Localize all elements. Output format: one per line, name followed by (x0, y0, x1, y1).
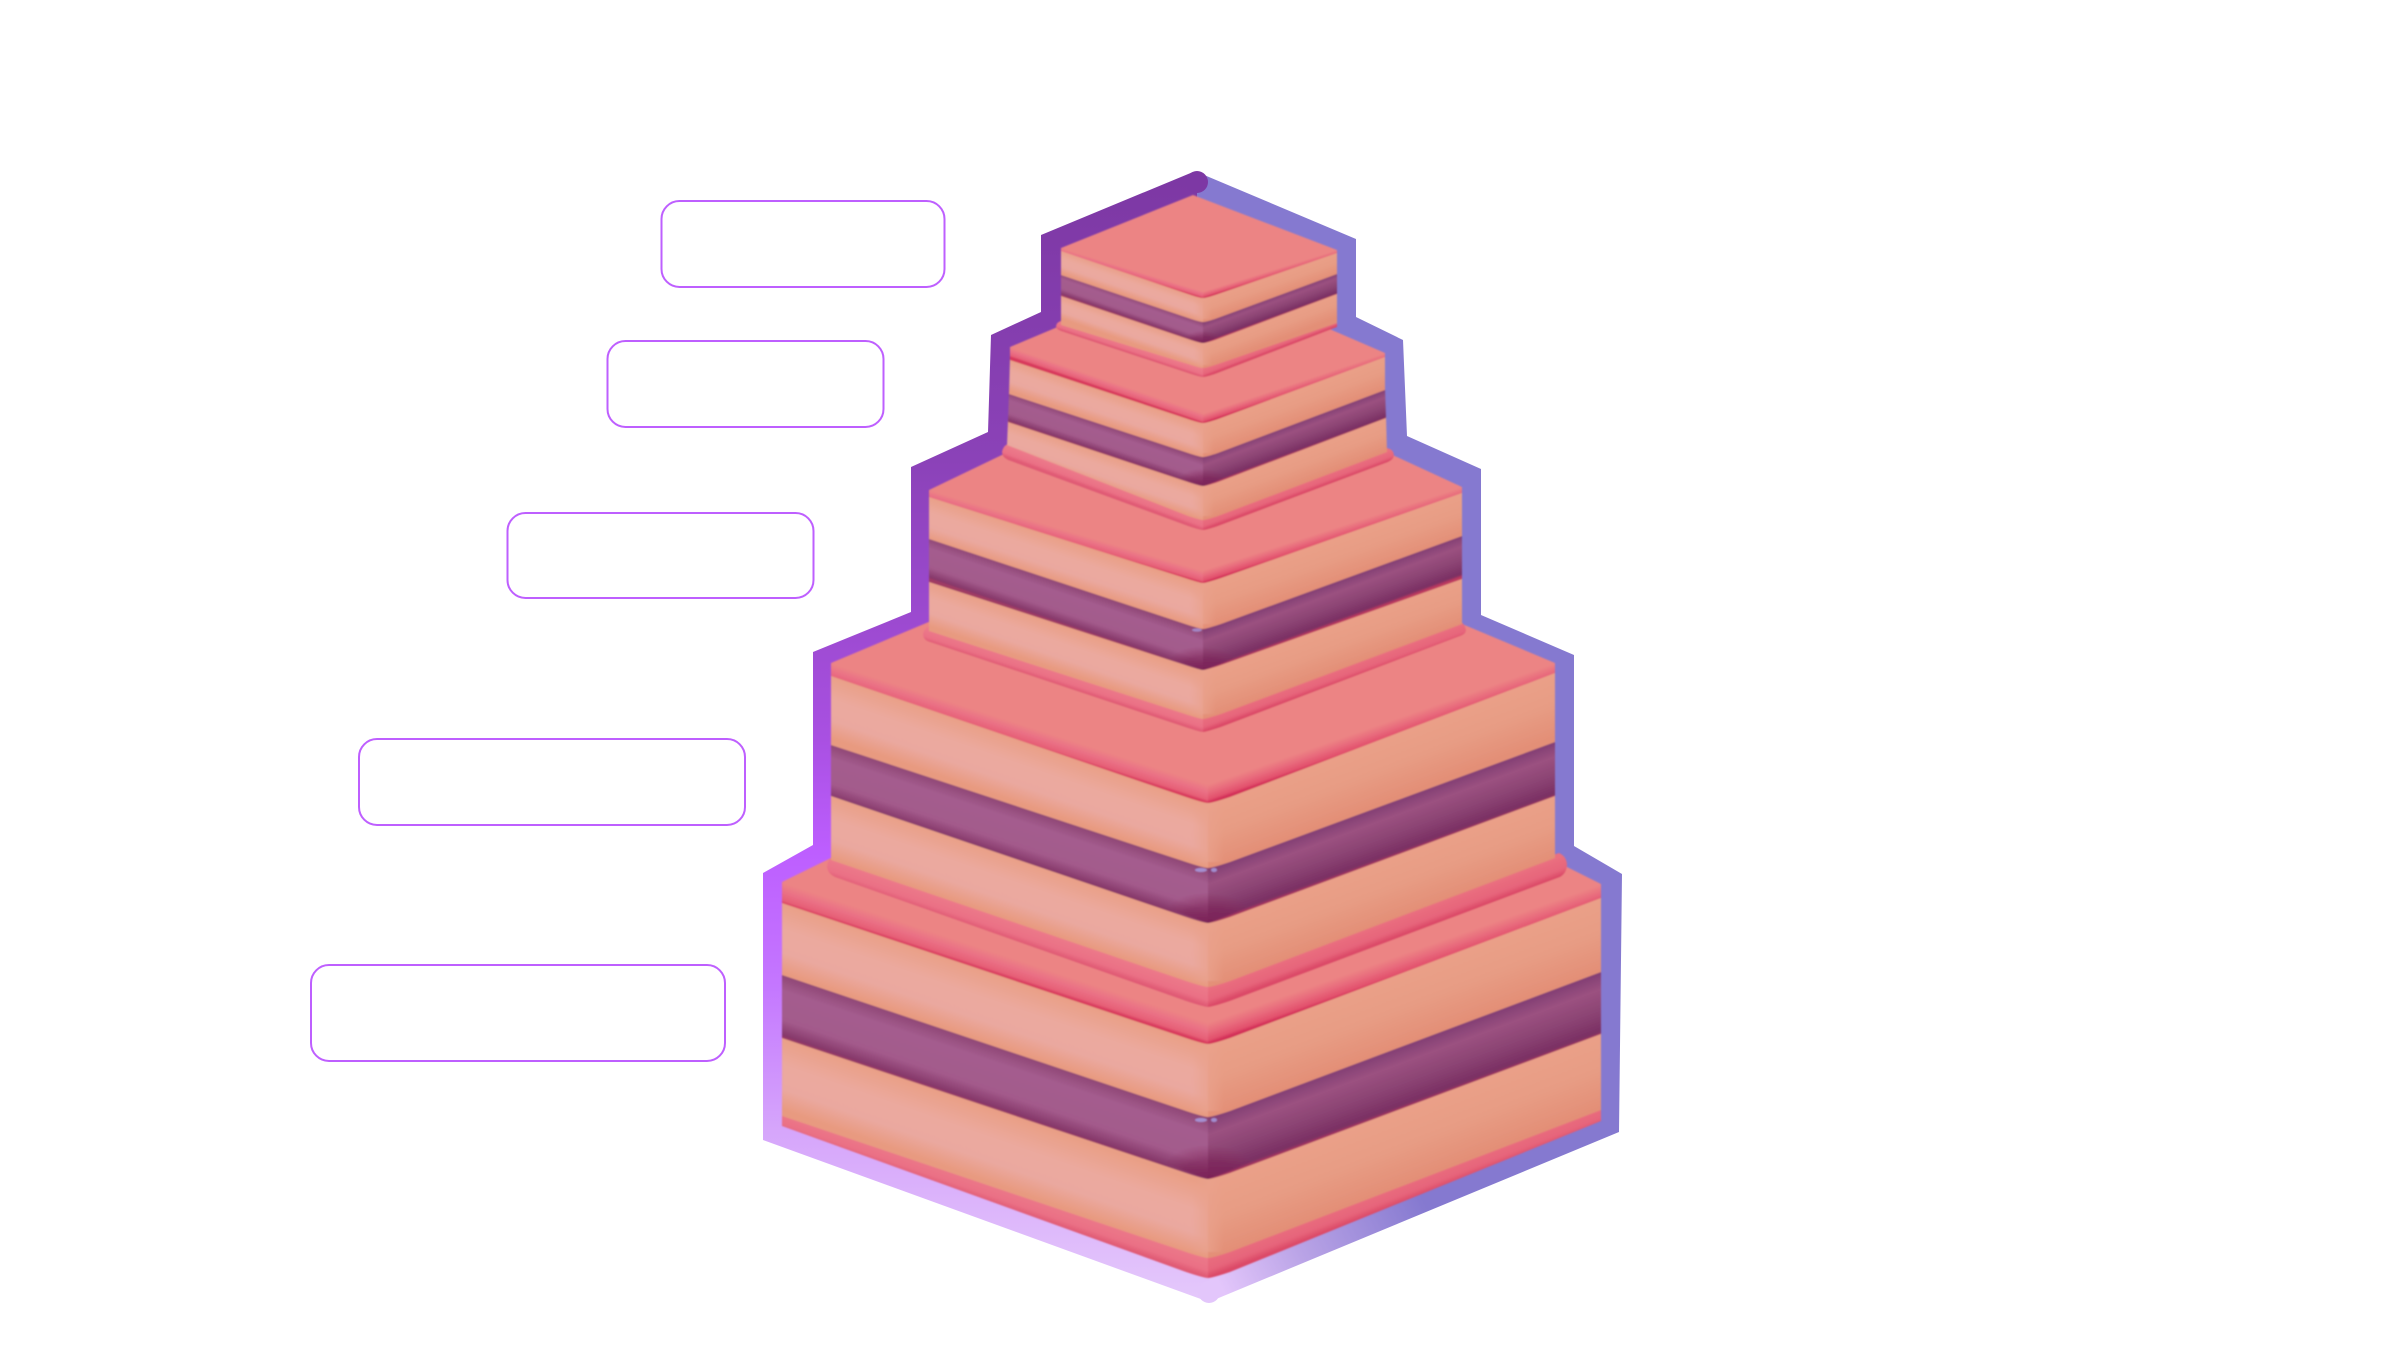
tier 5 base rim (782, 1102, 1601, 1278)
tier 2 top surface (1010, 270, 1385, 423)
tier 3 top rim (929, 487, 1462, 583)
tier 4 upper orange band (831, 671, 1555, 868)
tier 5 purple band (782, 970, 1601, 1179)
tier 1 purple band (1061, 272, 1337, 343)
pyramid tier 5 (bottom) (782, 680, 1601, 1278)
tier 1 lower orange band (1061, 292, 1337, 368)
pyramid (782, 195, 1601, 1278)
tier 3 base rim (923, 621, 1466, 732)
tier 2 purple band (1008, 388, 1386, 486)
tier 3 purple band (929, 534, 1462, 670)
pyramid tier 1 (top) (1056, 195, 1337, 377)
label box 1 (top tier) (662, 201, 944, 287)
tier 5 upper orange band (782, 896, 1601, 1117)
tier 4 purple band (831, 740, 1555, 923)
tier 1 top rim (1061, 248, 1337, 298)
tier 4 top rim (831, 663, 1555, 803)
tier 2 base rim (1002, 444, 1394, 530)
pyramid tier 3 (923, 363, 1466, 732)
purple outline around pyramid (763, 171, 1622, 1303)
tier 1 top surface (1061, 195, 1337, 297)
tier 3 upper orange band (929, 491, 1462, 629)
outline end cap (1198, 1281, 1220, 1303)
outline right half (1170, 172, 1622, 1302)
pyramid tier 2 (1002, 270, 1394, 530)
pyramid tier 4 (827, 511, 1567, 1007)
label box 5 (bottom tier) (311, 965, 725, 1061)
outline start cap (1186, 171, 1208, 193)
label box 4 (359, 739, 745, 825)
outline left half (763, 172, 1209, 1302)
tier 5 top rim (782, 882, 1601, 1044)
tier 3 lower orange band (929, 577, 1462, 719)
tier 4 base rim (827, 853, 1567, 1007)
label box 2 (608, 341, 884, 427)
tier 2 top rim (1010, 347, 1385, 423)
tier 4 top surface (831, 511, 1555, 803)
label box 3 (508, 513, 814, 598)
tier 3 top surface (929, 363, 1462, 583)
tier 2 lower orange band (1007, 416, 1387, 520)
tier 5 top surface (782, 680, 1601, 1044)
tier 4 lower orange band (831, 794, 1555, 987)
tier 2 upper orange band (1009, 355, 1385, 457)
tier 1 base rim (1056, 318, 1337, 377)
tier 5 lower orange band (782, 1032, 1601, 1258)
tier 1 upper orange band (1061, 249, 1337, 322)
